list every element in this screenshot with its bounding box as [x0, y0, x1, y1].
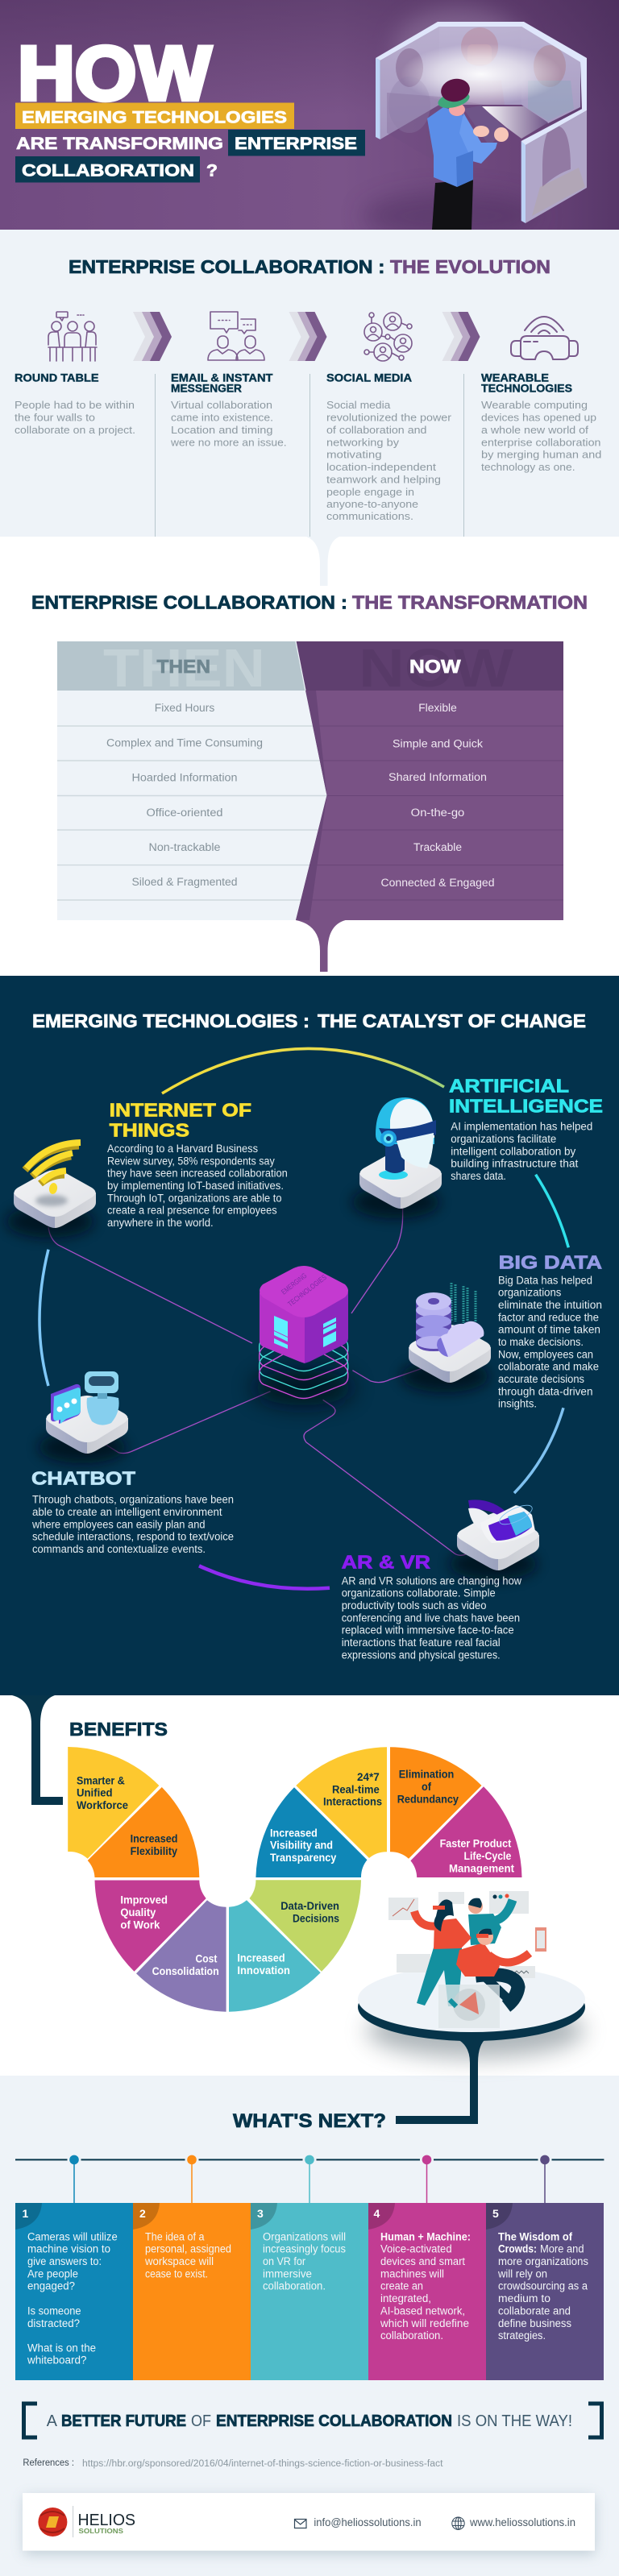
- now column rows: Flexible: [418, 702, 457, 714]
- card 4: Voice-activated: [380, 2243, 452, 2255]
- column: social media: people engage in: [326, 486, 414, 498]
- heading and text: chatbot: schedule interactions, respond to text/voice: [32, 1531, 234, 1543]
- column: round table: the four walls to: [15, 411, 95, 423]
- heading and text: internet of things: they have seen increased collaboration: [107, 1168, 288, 1180]
- heading: catalyst of change: [32, 1010, 586, 1031]
- now column rows: Trackable: [413, 841, 462, 853]
- heading and text: artificial intelligence: intelligent collaboration by: [451, 1145, 576, 1157]
- card 5: collaborate and: [498, 2304, 571, 2317]
- email contact: info@heliossolutions.in: [314, 2516, 422, 2528]
- now column rows: Shared Information: [388, 771, 487, 783]
- column: social media: [326, 371, 452, 522]
- heading and text: AR and VR: interactions that feature real facial: [342, 1636, 501, 1649]
- heading and text: big data: factor and reduce the: [498, 1311, 599, 1323]
- label: enterprise: ENTERPRISE: [235, 134, 357, 153]
- column: email and instant messenger: were no more an issue.: [170, 436, 287, 448]
- segment: data-driven decisions: Data-Driven: [280, 1900, 339, 1912]
- card 2: 2: [139, 2207, 146, 2220]
- segment: cost consolidation: Consolidation: [152, 1965, 219, 1977]
- heading and text: big data: through data-driven: [498, 1385, 593, 1397]
- ghost and header text: now: NOW: [359, 638, 514, 699]
- heading and text: artificial intelligence: ARTIFICIAL: [449, 1076, 569, 1097]
- segment: faster product life-cycle management: [410, 1786, 522, 1877]
- panel: evolution: [0, 230, 619, 586]
- callout: better future: [24, 2404, 601, 2437]
- card 5: crowdsourcing as a: [498, 2280, 588, 2292]
- now column rows: Connected & Engaged: [380, 877, 495, 889]
- column: email and instant messenger: MESSENGER: [171, 383, 242, 395]
- then column rows: Fixed Hours: [155, 702, 214, 714]
- heading and text: internet of things: According to a Harvard Business: [107, 1143, 258, 1155]
- tower label: TECHNOLOGIES: [286, 1273, 328, 1309]
- heading and text: artificial intelligence: organizations facilitate: [451, 1133, 556, 1145]
- text: question mark: ?: [206, 160, 218, 180]
- logo: helios solutions: [38, 2506, 135, 2537]
- heading and text: artificial intelligence: [449, 1076, 603, 1182]
- card 3: collaboration.: [263, 2280, 326, 2292]
- card 4: machines will: [380, 2267, 444, 2279]
- card 1: engaged?: [27, 2280, 75, 2292]
- heading and text: big data: organizations: [498, 1287, 562, 1299]
- heading and text: internet of things: create a real presence for employees: [107, 1205, 277, 1217]
- card 1: Is someone: [27, 2304, 81, 2317]
- arcs: [39, 1048, 568, 1589]
- timeline: [15, 2155, 604, 2203]
- segment: elimination of redundancy: Elimination: [399, 1769, 454, 1781]
- then column rows: Non-trackable: [148, 841, 221, 853]
- heading and text: AR and VR: productivity tools such as video: [342, 1599, 487, 1612]
- panel: whats next: [15, 2110, 604, 2380]
- column: wearable technologies: WEARABLE: [481, 371, 549, 384]
- card 2: [133, 2203, 251, 2380]
- card 5: strategies.: [498, 2329, 546, 2342]
- chevron arrow 1: [133, 312, 172, 361]
- card 2: The idea of a: [145, 2230, 205, 2242]
- callout: better future: OF: [191, 2412, 211, 2430]
- heading and text: internet of things: Review survey, 58% respondents say: [107, 1155, 275, 1167]
- heading and text: AR and VR: expressions and physical gestures.: [342, 1649, 501, 1661]
- card 3: Organizations will: [263, 2230, 346, 2242]
- icon: social media network: [364, 313, 412, 361]
- now column rows: On-the-go: [411, 807, 464, 819]
- column: social media: motivating: [326, 449, 382, 461]
- ghost and header text: then: THEN: [103, 638, 265, 699]
- card 1: distracted?: [27, 2317, 80, 2329]
- segment: smarter and unified workforce: [68, 1747, 159, 1859]
- then column rows: Office-oriented: [147, 807, 222, 819]
- card 3: increasingly focus: [263, 2243, 346, 2255]
- segment: faster product life-cycle management: Management: [449, 1862, 514, 1874]
- card 3: on VR for: [263, 2255, 305, 2267]
- column: social media: anyone-to-anyone: [326, 498, 418, 510]
- column: round table: ROUND TABLE: [15, 371, 98, 384]
- card 4: Human + Machine:: [380, 2230, 471, 2242]
- segment: 24*7 real-time interactions: Real-time: [332, 1783, 380, 1795]
- card 4: integrated,: [380, 2292, 431, 2304]
- panel: transformation: [31, 592, 588, 972]
- heading: catalyst of change: THE CATALYST OF CHANGE: [318, 1010, 586, 1031]
- column: round table: [15, 371, 135, 436]
- central tower: emerging technologies: [253, 1266, 353, 1405]
- column: email and instant messenger: Virtual collaboration: [171, 399, 272, 411]
- heading: the transformation: ENTERPRISE COLLABORATION :: [31, 592, 347, 613]
- segment: increased visibility and transparency: Transparency: [270, 1852, 337, 1864]
- label: enterprise: [228, 130, 365, 156]
- icon: VR headset on platform: [450, 1500, 539, 1580]
- card 1: machine vision to: [27, 2243, 110, 2255]
- segment: increased visibility and transparency: Increased: [270, 1827, 318, 1839]
- segment: faster product life-cycle management: Life-Cycle: [464, 1850, 512, 1862]
- segment: faster product life-cycle management: Faster Product: [440, 1838, 512, 1850]
- column: email and instant messenger: Location and timing: [171, 424, 272, 436]
- heading and text: big data: BIG DATA: [499, 1251, 602, 1272]
- heading and text: chatbot: Through chatbots, organizations have been: [32, 1494, 234, 1506]
- heading and text: AR and VR: organizations collaborate. Simple: [342, 1587, 496, 1599]
- title: [15, 31, 365, 182]
- heading and text: big data: amount of time taken: [498, 1324, 600, 1336]
- segment: increased innovation: Increased: [237, 1952, 285, 1964]
- website contact: www.heliossolutions.in: [469, 2516, 575, 2528]
- card 5: Crowds:: [498, 2243, 537, 2255]
- heading: the evolution: [69, 256, 550, 277]
- card 1: [15, 2203, 133, 2380]
- card 3: 3: [257, 2207, 264, 2220]
- panel: benefits: [12, 1695, 522, 2012]
- chevron arrow 2: [289, 312, 327, 361]
- dividers: [155, 374, 464, 537]
- label: collaboration: COLLABORATION: [22, 160, 194, 180]
- column: round table: collaborate on a project.: [15, 424, 135, 436]
- tower label: [280, 1271, 328, 1309]
- segment: increased innovation: Innovation: [237, 1964, 290, 1977]
- column: wearable technologies: technology as one.: [481, 461, 575, 473]
- icon: email and messenger: [208, 312, 264, 360]
- icon: wifi on platform: [6, 1143, 96, 1238]
- column: social media: of collaboration and: [326, 424, 427, 436]
- heading and text: chatbot: where employees can easily plan and: [31, 1518, 206, 1530]
- card 4: create an: [380, 2280, 423, 2292]
- card 1: whiteboard?: [27, 2354, 86, 2367]
- callout: better future: IS ON THE WAY!: [457, 2412, 572, 2430]
- connector to next section: [296, 920, 346, 972]
- segment: smarter and unified workforce: Workforce: [77, 1799, 128, 1811]
- heading: the evolution: THE EVOLUTION: [390, 256, 550, 277]
- card 2: cease to exist.: [145, 2267, 208, 2279]
- card 4: [368, 2203, 486, 2380]
- card 4: which will redefine: [380, 2317, 469, 2329]
- icon: AI head on platform: [352, 1097, 442, 1218]
- heading and text: AR and VR: conferencing and live chats have been: [342, 1612, 520, 1624]
- callout: better future: A: [47, 2412, 58, 2430]
- card 3: [251, 2203, 368, 2380]
- text: are transforming: ARE TRANSFORMING: [16, 134, 223, 153]
- segment: increased innovation: [229, 1900, 321, 2012]
- column: social media: networking by: [326, 436, 400, 448]
- segment: improved quality of work: of Work: [120, 1919, 160, 1931]
- heading and text: big data: [498, 1251, 602, 1410]
- card 4: collaboration.: [380, 2329, 443, 2342]
- card 5: The Wisdom of: [498, 2230, 572, 2242]
- card 5: more organizations: [498, 2255, 588, 2267]
- panel: catalyst of change: [0, 976, 619, 1695]
- card 1: Are people: [27, 2267, 78, 2279]
- card 5: define business: [498, 2317, 571, 2329]
- references: References :: [23, 2458, 74, 2468]
- column: wearable technologies: TECHNOLOGIES: [481, 383, 572, 395]
- table: then versus now: [57, 638, 563, 972]
- segment: data-driven decisions: [250, 1880, 361, 1972]
- heading and text: internet of things: THINGS: [110, 1119, 189, 1140]
- heading: HOW: HOW: [18, 31, 211, 116]
- heading and text: chatbot: commands and contextualize events.: [32, 1543, 206, 1555]
- panel: hero: [0, 0, 619, 240]
- heading and text: chatbot: CHATBOT: [31, 1468, 136, 1489]
- ghost and header text: then: THEN: [156, 656, 210, 677]
- heading and text: AR and VR: [342, 1552, 521, 1661]
- then column rows: Hoarded Information: [132, 772, 237, 784]
- callout: better future: BETTER FUTURE: [61, 2412, 186, 2430]
- segment: cost consolidation: [136, 1900, 226, 2012]
- card 1: What is on the: [27, 2342, 96, 2354]
- segment: 24*7 real-time interactions: [296, 1747, 387, 1858]
- panel: whats next background: [0, 2076, 619, 2576]
- icon: chatbot on platform: [39, 1371, 128, 1463]
- card 5: 5: [492, 2207, 499, 2220]
- card 5: [486, 2203, 604, 2380]
- heading and text: chatbot: able to create an intelligent environment: [32, 1506, 222, 1518]
- heading and text: big data: to make decisions.: [498, 1336, 584, 1348]
- now column rows: [380, 702, 495, 889]
- column: email and instant messenger: came into existence.: [171, 411, 273, 423]
- heading: the transformation: [31, 592, 588, 613]
- segment: smarter and unified workforce: Unified: [77, 1787, 113, 1799]
- card 5: medium to: [498, 2292, 550, 2304]
- column: round table: People had to be within: [15, 399, 135, 411]
- column: social media: communications.: [326, 510, 413, 522]
- segment: increased flexibility: Flexibility: [131, 1845, 177, 1857]
- column: social media: revolutionized the power: [326, 411, 452, 423]
- segment: elimination of redundancy: Redundancy: [397, 1793, 459, 1805]
- heading: catalyst of change: EMERGING TECHNOLOGIES :: [32, 1010, 310, 1031]
- heading and text: big data: Now, employees can: [498, 1348, 593, 1360]
- card 1: give answers to:: [27, 2255, 102, 2267]
- heading and text: internet of things: INTERNET OF: [110, 1100, 251, 1121]
- card 4: devices and smart: [380, 2255, 465, 2267]
- card 4: 4: [374, 2207, 380, 2220]
- column: social media: location-independent: [326, 461, 436, 473]
- segment: cost consolidation: Cost: [195, 1953, 218, 1965]
- segment: smarter and unified workforce: Smarter &: [77, 1774, 125, 1786]
- connector: navy bracket: [12, 1695, 63, 1805]
- heading: the transformation: THE TRANSFORMATION: [352, 592, 588, 613]
- then column rows: Siloed & Fragmented: [132, 876, 237, 888]
- logo: helios solutions: SOLUTIONS: [79, 2528, 124, 2535]
- logo: helios solutions: HELIOS: [77, 2512, 135, 2529]
- segment: 24*7 real-time interactions: 24*7: [357, 1771, 380, 1783]
- column: wearable technologies: devices has opened up: [481, 411, 596, 423]
- segment: improved quality of work: Quality: [120, 1906, 156, 1919]
- heading and text: artificial intelligence: shares data.: [451, 1170, 506, 1182]
- heading and text: internet of things: Through IoT, organizations are able to: [107, 1192, 282, 1204]
- segment: improved quality of work: Improved: [120, 1894, 168, 1906]
- card 4: AI-based network,: [380, 2304, 465, 2317]
- heading and text: internet of things: anywhere in the world.: [107, 1217, 214, 1229]
- heading and text: AR and VR: AR & VR: [342, 1552, 430, 1573]
- heading and text: big data: accurate decisions: [498, 1373, 584, 1385]
- heading and text: big data: Big Data has helped: [498, 1274, 592, 1286]
- heading: benefits: BENEFITS: [69, 1719, 168, 1740]
- heading: whats next: WHAT'S NEXT?: [233, 2110, 386, 2132]
- column: wearable technologies: enterprise collaboration: [481, 436, 601, 448]
- illustration: man in virtual meeting booth: [363, 8, 587, 240]
- column: social media: teamwork and helping: [326, 473, 441, 485]
- icon: big data on platform: [401, 1283, 491, 1392]
- card 2: personal, assigned: [145, 2243, 231, 2255]
- references: https://hbr.org/sponsored/2016/04/internet-of-things-science-fiction-or-business-fact: [82, 2459, 443, 2469]
- card 5: will rely on: [497, 2267, 547, 2279]
- column: wearable technologies: a whole new world of: [481, 424, 588, 436]
- now column rows: Simple and Quick: [393, 738, 483, 749]
- heading and text: artificial intelligence: building infrastructure that: [451, 1158, 579, 1170]
- segment: increased flexibility: Increased: [131, 1833, 177, 1845]
- chevron arrow 3: [442, 312, 480, 361]
- segment: 24*7 real-time interactions: Interactions: [323, 1796, 382, 1808]
- tower label: EMERGING: [280, 1271, 308, 1296]
- heading and text: AR and VR: replaced with immersive face-to-face: [342, 1624, 514, 1636]
- column: social media: Social media: [326, 399, 391, 411]
- label: emerging technologies: EMERGING TECHNOLOGIES: [22, 107, 287, 127]
- heading and text: artificial intelligence: AI implementation has helped: [451, 1121, 592, 1133]
- label: emerging technologies: [15, 103, 294, 129]
- column: wearable technologies: by merging human and: [481, 449, 601, 461]
- heading and text: big data: eliminate the intuition: [498, 1299, 602, 1311]
- card 5: More and: [540, 2243, 584, 2255]
- card 1: 1: [23, 2207, 29, 2220]
- card 1: Cameras will utilize: [27, 2230, 118, 2242]
- segment: elimination of redundancy: [390, 1747, 482, 1859]
- column: social media: SOCIAL MEDIA: [326, 371, 412, 384]
- segment: increased visibility and transparency: [255, 1787, 368, 1877]
- heading: the evolution: ENTERPRISE COLLABORATION :: [69, 256, 385, 277]
- segment: increased visibility and transparency: Visibility and: [270, 1840, 333, 1852]
- segment: increased flexibility: [88, 1787, 199, 1877]
- heading and text: big data: collaborate and make: [498, 1361, 599, 1373]
- column: wearable technologies: [481, 371, 601, 473]
- heading and text: artificial intelligence: INTELLIGENCE: [449, 1096, 603, 1117]
- heading and text: chatbot: [31, 1468, 234, 1555]
- label: collaboration: [15, 156, 200, 182]
- footer card: [23, 2493, 595, 2554]
- column: wearable technologies: Wearable computing: [481, 399, 588, 411]
- connector lines: [48, 1203, 466, 1555]
- card 2: workspace will: [144, 2255, 214, 2267]
- icon: VR headset: [511, 317, 578, 359]
- heading and text: AR and VR: AR and VR solutions are changing how: [342, 1574, 521, 1587]
- segment: improved quality of work: [95, 1881, 206, 1972]
- then column rows: Complex and Time Consuming: [106, 736, 263, 749]
- heading and text: big data: insights.: [498, 1398, 537, 1410]
- column: email and instant messenger: EMAIL & INSTANT: [171, 371, 273, 384]
- heading and text: internet of things: by implementing IoT-based initiatives.: [107, 1180, 284, 1192]
- segment: data-driven decisions: Decisions: [293, 1912, 339, 1924]
- callout: better future: ENTERPRISE COLLABORATION: [216, 2412, 452, 2430]
- illustration: people on platform: [358, 1891, 585, 2124]
- heading and text: internet of things: [107, 1100, 288, 1229]
- segment: elimination of redundancy: of: [422, 1781, 431, 1793]
- card 3: immersive: [263, 2267, 312, 2279]
- then column rows: [106, 702, 263, 888]
- column: email and instant messenger: [170, 371, 287, 448]
- icon: round table: [48, 312, 97, 361]
- ghost and header text: now: NOW: [409, 656, 461, 677]
